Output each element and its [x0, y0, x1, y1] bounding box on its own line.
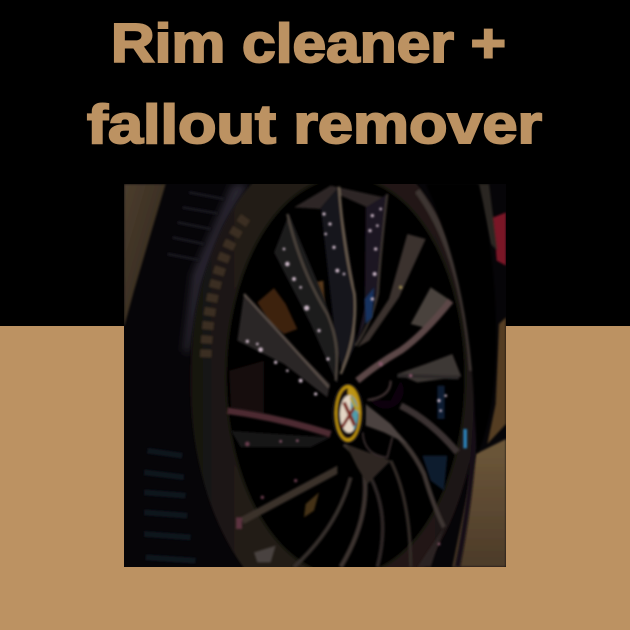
tan lower panel	[0, 326, 630, 630]
blue reflections	[365, 287, 467, 491]
tread grooves	[144, 192, 224, 561]
rim barrel	[190, 141, 478, 621]
background wall	[124, 184, 166, 327]
wheel spokes	[227, 186, 461, 567]
background strip and red car detail	[477, 184, 506, 444]
tyre tread	[183, 184, 249, 354]
floor	[452, 439, 506, 567]
title: Rim cleaner +	[111, 12, 506, 74]
water beading specks	[245, 208, 447, 545]
title: fallout remover	[87, 93, 542, 155]
photo base	[124, 184, 506, 567]
brake caliper	[229, 281, 325, 517]
photo: wheel close-up	[124, 184, 506, 567]
hub badge	[331, 383, 365, 444]
fender arch	[426, 184, 496, 454]
title	[86, 12, 542, 155]
